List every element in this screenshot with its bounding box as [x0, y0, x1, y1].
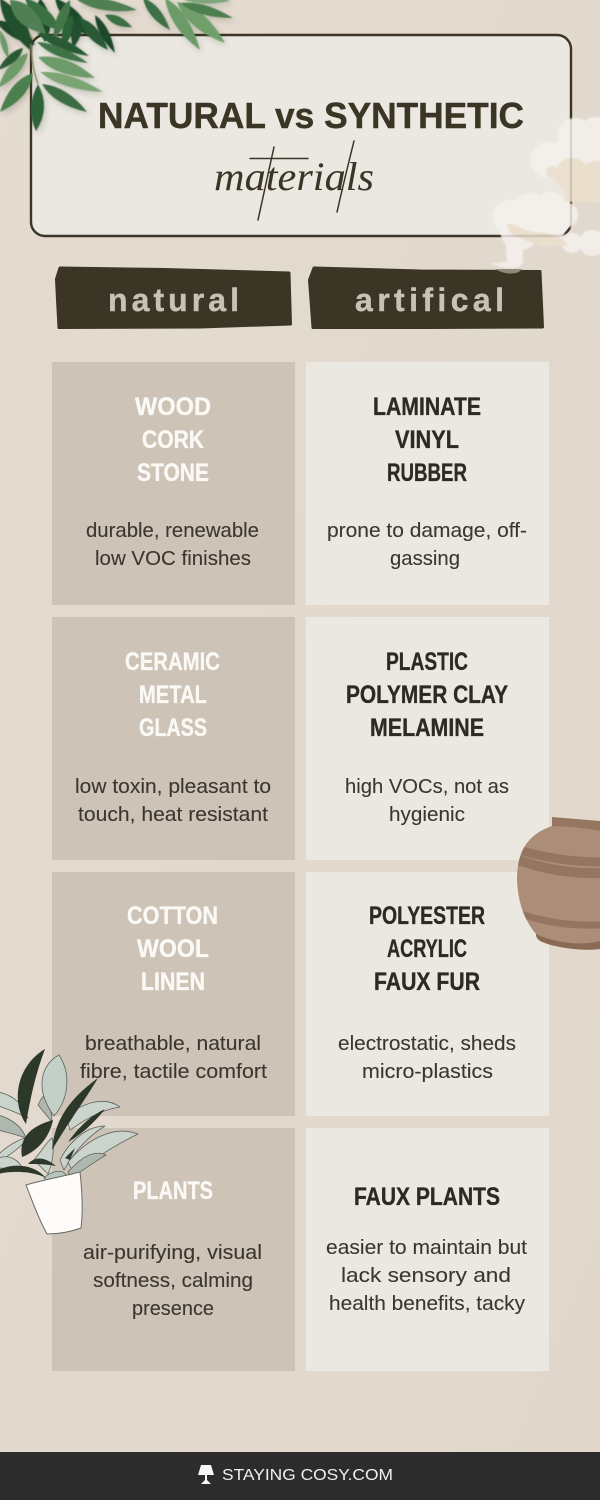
- panel: faux plants: FAUX PLANTS: [354, 1183, 500, 1211]
- cloud beige puff: [546, 158, 600, 203]
- panel: polyester acrylic faux fur: POLYESTER: [369, 902, 485, 930]
- panel: plastic polymer clay melamine: high VOCs, not as: [345, 775, 509, 798]
- panel: faux plants: [306, 1128, 549, 1371]
- label bar: natural: [56, 268, 290, 328]
- footer bar: [0, 1452, 600, 1500]
- cloud upper white puff: [530, 117, 600, 182]
- panel: plastic polymer clay melamine: [306, 617, 549, 860]
- panel: polyester acrylic faux fur: electrostatic, sheds: [338, 1032, 516, 1055]
- panel: ceramic metal glass: METAL: [139, 681, 207, 709]
- panel: cotton wool linen: fibre, tactile comfort: [80, 1060, 267, 1083]
- cloud lower white puff: [490, 192, 600, 268]
- footer bar: STAYING COSY.COM: [222, 1467, 393, 1484]
- panel: faux plants: health benefits, tacky: [329, 1292, 526, 1315]
- label bar: artificial: artifical: [355, 282, 504, 318]
- title panel: [31, 35, 571, 236]
- panel: plants: air-purifying, visual: [83, 1241, 262, 1264]
- panel: laminate vinyl rubber: VINYL: [395, 426, 459, 454]
- panel: wood cork stone: WOOD: [135, 393, 211, 421]
- panel: laminate vinyl rubber: prone to damage, off-: [327, 519, 527, 542]
- panel: laminate vinyl rubber: RUBBER: [387, 459, 467, 487]
- panel: cotton wool linen: WOOL: [137, 935, 209, 963]
- panel: polyester acrylic faux fur: micro-plastics: [362, 1060, 493, 1083]
- label bar: natural: natural: [108, 282, 239, 318]
- panel: plants: PLANTS: [133, 1177, 213, 1205]
- panel: ceramic metal glass: GLASS: [139, 714, 207, 742]
- panel: plants: presence: [132, 1297, 214, 1320]
- icon: palm leaves: [0, 0, 233, 131]
- label bar: artificial: [310, 268, 542, 328]
- panel: ceramic metal glass: low toxin, pleasant to: [75, 775, 271, 798]
- panel: plastic polymer clay melamine: MELAMINE: [370, 714, 484, 742]
- panel: cotton wool linen: LINEN: [141, 968, 205, 996]
- icon: clay vase: [512, 817, 600, 950]
- cloud beige wisp: [507, 224, 567, 246]
- panel: plastic polymer clay melamine: PLASTIC: [386, 648, 468, 676]
- panel: polyester acrylic faux fur: FAUX FUR: [374, 968, 480, 996]
- panel: wood cork stone: [52, 362, 295, 605]
- panel: ceramic metal glass: CERAMIC: [125, 648, 220, 676]
- panel: laminate vinyl rubber: LAMINATE: [373, 393, 481, 421]
- panel: cotton wool linen: COTTON: [127, 902, 218, 930]
- icon: lamp: [198, 1465, 214, 1484]
- plant dark leaves: [0, 1049, 105, 1178]
- panel: wood cork stone: low VOC finishes: [95, 547, 251, 570]
- panel: polyester acrylic faux fur: [306, 872, 549, 1116]
- panel: plants: [52, 1128, 295, 1371]
- plant white pot: [26, 1172, 82, 1234]
- panel: ceramic metal glass: [52, 617, 295, 860]
- panel: laminate vinyl rubber: gassing: [390, 547, 460, 570]
- panel: plants: softness, calming: [93, 1269, 253, 1292]
- plant pale leaves: [0, 1055, 138, 1184]
- title script word: [214, 141, 374, 220]
- panel: polyester acrylic faux fur: ACRYLIC: [387, 935, 467, 963]
- panel: faux plants: easier to maintain but: [326, 1236, 527, 1259]
- icon: smoke cloud: [490, 117, 600, 268]
- icon: potted plant: [0, 1049, 138, 1234]
- panel: cotton wool linen: breathable, natural: [85, 1032, 261, 1055]
- panel: plastic polymer clay melamine: POLYMER CLAY: [346, 681, 508, 709]
- title script word: materials: [214, 154, 374, 199]
- panel: faux plants: lack sensory and: [341, 1264, 511, 1287]
- panel: wood cork stone: STONE: [137, 459, 209, 487]
- panel: cotton wool linen: [52, 872, 295, 1116]
- panel: wood cork stone: durable, renewable: [86, 519, 259, 542]
- panel: laminate vinyl rubber: [306, 362, 549, 605]
- title heading: NATURAL vs SYNTHETIC: [98, 95, 524, 136]
- panel: wood cork stone: CORK: [142, 426, 204, 454]
- panel: plastic polymer clay melamine: hygienic: [389, 803, 465, 826]
- panel: ceramic metal glass: touch, heat resistant: [78, 803, 268, 826]
